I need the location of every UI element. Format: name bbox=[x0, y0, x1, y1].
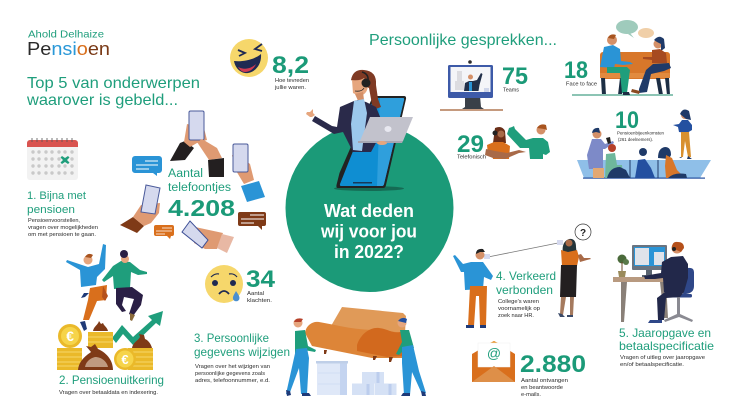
stat: emails 2.880: en beantwoorde bbox=[521, 385, 563, 391]
stat: tevredenheid 8,2: Hoe tevreden bbox=[275, 78, 309, 84]
stat: klachten 34: 34 bbox=[246, 266, 276, 293]
illustration: jumping people and money bbox=[57, 244, 163, 370]
man bbox=[600, 34, 633, 95]
speech bubble blue bbox=[132, 156, 162, 176]
stat: teams 75: Teams bbox=[503, 88, 519, 94]
text: topic 4 verkeerd verbonden: verbonden bbox=[496, 283, 553, 297]
text: topic 1 bijna met pensioen: 1. Bijna met bbox=[27, 190, 86, 202]
agent bbox=[306, 70, 413, 152]
heading: persoonlijke gesprekken: Persoonlijke gesprekken... bbox=[369, 32, 557, 49]
stat: aantal telefoontjes 4.208: Aantal bbox=[168, 168, 203, 180]
platform bbox=[577, 160, 711, 179]
text: topic 1 bijna met pensioen: Pensioenvoorstellen, bbox=[28, 218, 80, 224]
heading: top 5 onderwerpen: waarover is gebeld... bbox=[26, 92, 178, 109]
text: topic 5 jaaropgave en betaalspecificatie: Vragen of uitleg over jaaropgave bbox=[620, 355, 705, 361]
text: topic 5 jaaropgave en betaalspecificatie bbox=[619, 326, 714, 368]
stat: pensioenbijeenkomsten 10 bbox=[615, 107, 664, 142]
logo: Ahold Delhaize Pensioen bbox=[27, 28, 110, 59]
text: topic 3 persoonlijke gegevens wijzigen: 3. Persoonlijke bbox=[194, 331, 269, 345]
heading: top 5 onderwerpen bbox=[26, 75, 200, 109]
illustration: person at desk with computer bbox=[613, 242, 694, 323]
man on phone bbox=[507, 124, 550, 159]
seated woman bbox=[658, 147, 687, 178]
presenter bbox=[673, 110, 692, 159]
stat: klachten 34: klachten. bbox=[247, 298, 272, 304]
stat: telefonisch 29: 29 bbox=[457, 131, 484, 158]
computer bbox=[632, 245, 667, 277]
woman with headset bbox=[485, 127, 526, 159]
stat: emails 2.880: e-mails. bbox=[521, 392, 541, 398]
text: topic 5 jaaropgave en betaalspecificatie: betaalspecificatie bbox=[619, 339, 714, 353]
stat: teams 75: 75 bbox=[502, 63, 528, 90]
stat: face to face 18: 18 bbox=[564, 57, 588, 84]
seated woman red hair bbox=[605, 144, 630, 178]
illustration: movers carrying couch bbox=[286, 307, 426, 396]
stat: face to face 18: Face to face bbox=[566, 82, 597, 88]
coins and bags: € bbox=[66, 328, 74, 344]
stat: tevredenheid 8,2: jullie waren. bbox=[274, 85, 306, 91]
text: topic 1 bijna met pensioen bbox=[27, 190, 98, 238]
speech bubbles bbox=[616, 20, 654, 38]
stat: tevredenheid 8,2 bbox=[272, 52, 309, 91]
text: topic 2 pensioenuitkering bbox=[59, 373, 164, 396]
illustration: telephone conversation bbox=[485, 124, 550, 159]
cabinet and boxes bbox=[316, 361, 396, 395]
man standing bbox=[587, 128, 614, 178]
stat: emails 2.880 bbox=[520, 351, 586, 398]
woman bbox=[631, 37, 671, 94]
stat: aantal telefoontjes 4.208: 4.208 bbox=[168, 195, 235, 221]
mover right bbox=[396, 318, 426, 396]
title: wat deden wij voor jou in 2022: in 2022? bbox=[334, 242, 404, 262]
text: topic 1 bijna met pensioen: vragen over mogelijkheden bbox=[28, 225, 98, 231]
stat: pensioenbijeenkomsten 10: (261 deelnemers). bbox=[618, 137, 653, 142]
heading: top 5 onderwerpen: Top 5 van onderwerpen bbox=[27, 75, 200, 92]
phone left with hand bbox=[120, 185, 160, 233]
stat: pensioenbijeenkomsten 10: 10 bbox=[615, 107, 639, 134]
speech bubble orange bbox=[154, 225, 174, 239]
text: topic 3 persoonlijke gegevens wijzigen: Vragen over het wijzigen van bbox=[195, 364, 270, 370]
stat: klachten 34 bbox=[246, 266, 276, 304]
text: topic 4 verkeerd verbonden: voornamelijk op bbox=[498, 306, 540, 312]
mover left bbox=[286, 318, 316, 396]
stat: emails 2.880: Aantal ontvangen bbox=[521, 378, 568, 384]
logo: Ahold Delhaize Pensioen: Ahold Delhaize bbox=[28, 28, 104, 40]
couch bbox=[572, 52, 673, 96]
illustration: face to face conversation bbox=[572, 20, 673, 96]
text: topic 4 verkeerd verbonden bbox=[496, 269, 556, 319]
text: topic 2 pensioenuitkering: Vragen over betaaldata en indexering. bbox=[59, 390, 158, 396]
stat: emails 2.880: 2.880 bbox=[520, 351, 586, 378]
illustration: teams video call bbox=[440, 60, 503, 111]
text: topic 4 verkeerd verbonden: 4. Verkeerd bbox=[496, 269, 556, 283]
text: topic 3 persoonlijke gegevens wijzigen: gegevens wijzigen bbox=[194, 345, 290, 359]
text: topic 4 verkeerd verbonden: zoek naar HR. bbox=[498, 313, 534, 319]
icon: laughing emoji bbox=[230, 39, 268, 77]
coins and bags: € bbox=[121, 352, 129, 367]
logo: Ahold Delhaize Pensioen: Pensioen bbox=[27, 38, 110, 59]
stat: klachten 34: Aantal bbox=[247, 291, 264, 297]
icon: open envelope bbox=[472, 341, 515, 382]
circle: central green disc bbox=[286, 124, 454, 292]
stat: aantal telefoontjes 4.208: telefoontjes bbox=[168, 182, 231, 194]
text: topic 3 persoonlijke gegevens wijzigen: persoonlijke gegevens zoals bbox=[195, 371, 265, 377]
text: topic 5 jaaropgave en betaalspecificatie: en/of betaalspecificatie. bbox=[620, 362, 684, 368]
text: topic 4 verkeerd verbonden: College's waren bbox=[498, 299, 539, 305]
title: wat deden wij voor jou in 2022: wij voor jou bbox=[320, 222, 417, 242]
stat: aantal telefoontjes 4.208 bbox=[168, 168, 235, 221]
text: topic 3 persoonlijke gegevens wijzigen bbox=[194, 331, 290, 384]
illustration: call centre agent in phone bbox=[306, 70, 413, 191]
title: wat deden wij voor jou in 2022 bbox=[320, 201, 417, 262]
coins and bags bbox=[57, 311, 163, 370]
desk and plant bbox=[613, 254, 670, 322]
man with can bbox=[453, 249, 493, 328]
icon: sad emoji bbox=[205, 265, 243, 303]
stat: tevredenheid 8,2: 8,2 bbox=[272, 52, 309, 79]
phone right with hand bbox=[232, 144, 265, 202]
phone bbox=[334, 96, 406, 191]
illustration: wrong number tin can phone bbox=[453, 224, 591, 328]
text: topic 1 bijna met pensioen: pensioen bbox=[27, 204, 75, 216]
man jumping bbox=[66, 244, 108, 331]
text: topic 3 persoonlijke gegevens wijzigen: adres, telefoonnummer, e.d. bbox=[195, 378, 270, 384]
text: topic 1 bijna met pensioen: om met pensioen te gaan. bbox=[28, 232, 96, 238]
phone bottom with hand bbox=[182, 221, 234, 253]
speech bubble brown bbox=[238, 212, 266, 230]
couch bbox=[305, 307, 407, 362]
text: topic 2 pensioenuitkering: 2. Pensioenuitkering bbox=[59, 373, 164, 387]
text: topic 5 jaaropgave en betaalspecificatie: 5. Jaaropgave en bbox=[619, 326, 711, 340]
phone top with hand bbox=[170, 111, 224, 177]
icon: open envelope: @ bbox=[487, 345, 501, 361]
seated man bbox=[630, 148, 655, 178]
string bbox=[484, 240, 563, 259]
stat: pensioenbijeenkomsten 10: Pensioenbijeenkomsten bbox=[617, 130, 664, 136]
illustration: hands holding phones bbox=[120, 111, 266, 253]
stat: telefonisch 29: Telefonisch bbox=[457, 154, 486, 160]
woman jumping bbox=[102, 250, 147, 321]
question mark bubble: ? bbox=[580, 228, 586, 239]
icon: calendar bbox=[27, 138, 78, 180]
title: wat deden wij voor jou in 2022: Wat deden bbox=[324, 201, 414, 221]
illustration: pension meeting audience bbox=[577, 110, 711, 179]
man on chair bbox=[644, 242, 694, 323]
